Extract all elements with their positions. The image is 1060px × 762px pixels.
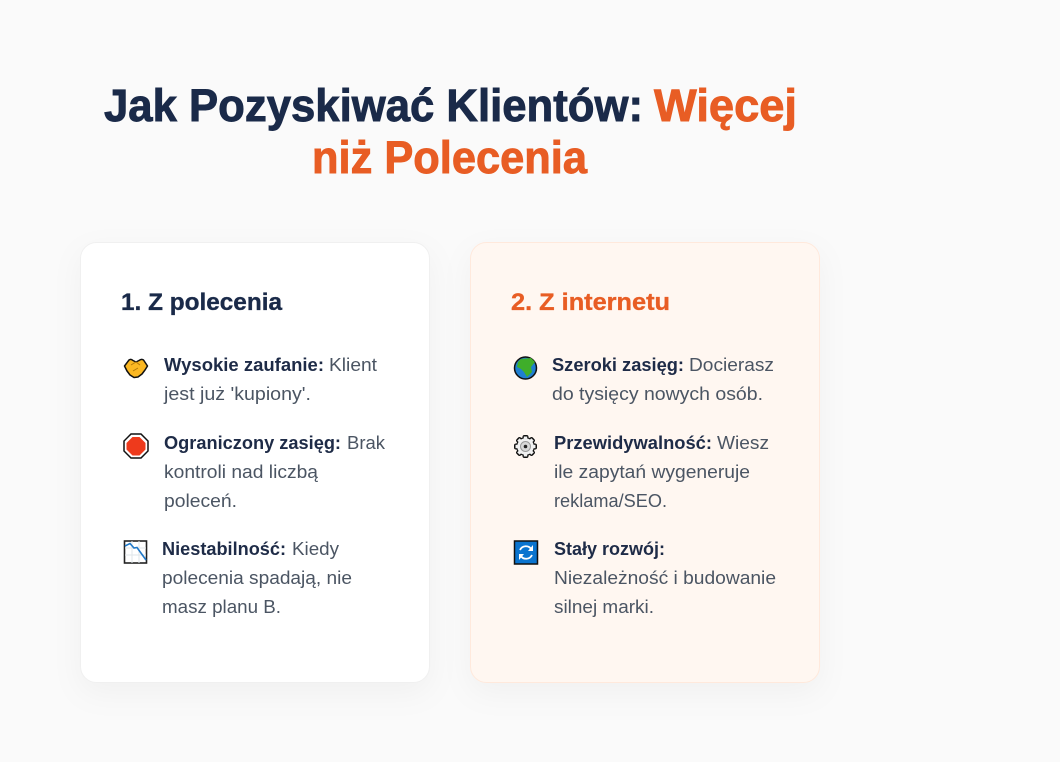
text: ograniczony zasięg: Brak <box>347 433 386 453</box>
text: niestabilność: Kiedy <box>292 539 339 559</box>
heading: 1. Z polecenia: 1. Z polecenia <box>121 289 283 316</box>
text: szeroki zasięg: do tysięcy nowych osób. <box>552 384 763 404</box>
panel: z internetu <box>470 242 820 682</box>
heading: 2. Z internetu: 2. Z internetu <box>511 289 670 316</box>
text: wysokie zaufanie: Klient <box>329 355 377 375</box>
text: stały rozwój: Stały rozwój: <box>554 539 665 559</box>
text: stały rozwój <box>554 539 776 617</box>
text: ograniczony zasięg: Ograniczony zasięg: <box>164 433 341 453</box>
text: ograniczony zasięg <box>164 433 386 511</box>
icon: globe <box>514 357 536 379</box>
text: szeroki zasięg: Szeroki zasięg: <box>552 355 684 375</box>
text: stały rozwój: Niezależność i budowanie <box>554 568 776 588</box>
text: ograniczony zasięg: poleceń. <box>164 491 237 511</box>
text: stały rozwój: silnej marki. <box>554 597 654 617</box>
text: ograniczony zasięg: kontroli nad liczbą <box>164 462 319 482</box>
text: szeroki zasięg <box>552 355 774 404</box>
text: niestabilność <box>162 539 352 617</box>
title: Jak Pozyskiwać Klientów: <box>104 80 643 131</box>
text: przewidywalność <box>554 433 769 511</box>
title: niż Polecenia <box>312 132 588 183</box>
text: niestabilność: masz planu B. <box>162 597 281 617</box>
icon: refresh <box>514 541 538 564</box>
text: niestabilność: polecenia spadają, nie <box>162 568 352 588</box>
text: przewidywalność: reklama/SEO. <box>554 491 667 511</box>
icon: stop sign <box>124 434 148 458</box>
title: Więcej <box>654 80 797 131</box>
text: szeroki zasięg: Docierasz <box>689 355 774 375</box>
text: przewidywalność: Wiesz <box>717 433 769 453</box>
icon: gear <box>514 435 537 458</box>
text: wysokie zaufanie <box>163 355 377 404</box>
text: przewidywalność: ile zapytań wygeneruje <box>554 462 750 482</box>
text: wysokie zaufanie: Wysokie zaufanie: <box>164 355 324 375</box>
icon: falling chart <box>124 541 146 563</box>
title <box>104 80 797 183</box>
text: wysokie zaufanie: jest już 'kupiony'. <box>163 384 311 404</box>
text: przewidywalność: Przewidywalność: <box>554 433 712 453</box>
text: niestabilność: Niestabilność: <box>162 539 286 559</box>
icon: handshake <box>124 359 148 378</box>
panel: z polecenia <box>80 242 430 682</box>
